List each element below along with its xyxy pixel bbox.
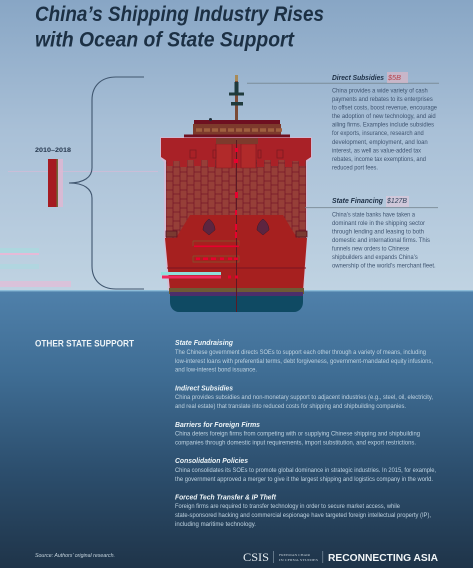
title — [35, 1, 324, 52]
text: direct subsidies body: China provides a wide variety of cash — [332, 88, 428, 94]
text: state financing body: dominant role in the shipping sector — [332, 220, 425, 227]
text: state financing body — [332, 211, 436, 270]
logos: CSIS and Reconnecting Asia: IN CHINA STUDIES — [279, 558, 319, 562]
panel: consolidation policies: China consolidates its SOEs to promote global dominance in strategic industries. In 2015, for example, — [175, 467, 436, 474]
text: direct subsidies body: development, employment, and loan — [332, 139, 428, 146]
ship red dashes — [161, 148, 239, 278]
heading: state financing — [332, 196, 409, 207]
ship bridge — [184, 118, 290, 138]
text: direct subsidies body — [332, 88, 438, 171]
text: state financing body: China’s state banks have taken a — [332, 211, 416, 218]
panel: consolidation policies — [175, 456, 436, 483]
heading: other state support: OTHER STATE SUPPORT — [35, 338, 134, 348]
ship container stacks — [166, 160, 306, 240]
panel: indirect subsidies: China provides subsidies and non-monetary support to adjacent industries (e.g., steel, oil, electricity, — [175, 394, 433, 401]
text: direct subsidies body: the adoption of new technology, and aid — [332, 113, 436, 120]
panel: indirect subsidies: and real estate) that translate into reduced costs for shipping and shipbuilding companies. — [175, 403, 406, 410]
logos: CSIS and Reconnecting Asia: FREEMAN CHAIR — [279, 553, 310, 557]
ship stripes and waterline — [166, 138, 307, 312]
panel: direct subsidies — [247, 72, 439, 171]
text: direct subsidies body: for exports, insurance, research and — [332, 130, 424, 137]
panel: forced tech transfer and IP theft: Forced Tech Transfer & IP Theft — [175, 492, 276, 502]
panel: state fundraising: and low-interest bond issuance. — [175, 367, 257, 374]
text: state financing body: through lending and leasing to both — [332, 228, 425, 236]
panel: state fundraising: low-interest loans with preferential terms, debt forgiveness, government-mandated equity infusions, — [175, 358, 433, 365]
logos: CSIS and Reconnecting Asia: CSIS — [243, 552, 269, 564]
panel: state fundraising: State Fundraising — [175, 338, 233, 347]
title: with Ocean of State Support — [35, 26, 295, 52]
panel: consolidation policies: the government approved a merger to give it the largest shipping and logistics company in the world. — [175, 476, 433, 483]
panel: barriers for foreign firms — [175, 420, 421, 446]
heading: state financing: $127B — [386, 196, 407, 205]
panel: state fundraising: The Chinese government directs SOEs to support each other through a variety of means, including — [175, 349, 427, 356]
logos: CSIS and Reconnecting Asia — [243, 551, 438, 564]
panel: barriers for foreign firms: Barriers for Foreign Firms — [175, 420, 260, 429]
panel: forced tech transfer and IP theft: Foreign firms are required to transfer technology in order to secure market access, while — [175, 503, 401, 510]
heading: direct subsidies: $5B — [387, 73, 401, 82]
text: state financing body: ownership of the world’s merchant fleet. — [332, 262, 436, 270]
text: state financing body: shipbuilders and expands China’s — [332, 254, 418, 261]
text: state financing body: funnels new orders to Chinese — [332, 246, 410, 252]
title: China’s Shipping Industry Rises — [35, 1, 324, 26]
panel: barriers for foreign firms: China deters foreign firms from competing with or supplying Chinese shipping and shipbuilding — [175, 430, 421, 438]
ship deck — [161, 138, 311, 168]
heading: state financing: State Financing — [332, 196, 383, 205]
heading: direct subsidies — [332, 72, 408, 83]
ship mast — [229, 75, 244, 122]
panel: consolidation policies: Consolidation Policies — [175, 456, 248, 465]
brace — [69, 77, 144, 289]
ship lower hull — [165, 215, 307, 291]
panel: barriers for foreign firms: companies through domestic input requirements, import substitution, and export restrictions. — [175, 440, 416, 446]
ship anchors — [203, 219, 269, 235]
ship hull outline halo — [160, 137, 312, 291]
text: direct subsidies body: ailing firms. Examples include subsidies — [332, 122, 434, 129]
timeframe bar: 2010–2018 — [35, 147, 71, 207]
sky background — [0, 0, 473, 291]
text: direct subsidies body: payments and rebates to its enterprises — [332, 96, 433, 103]
text: direct subsidies body: interest, as well as value-added tax — [332, 147, 422, 154]
icon: container ship — [160, 75, 312, 312]
text: direct subsidies body: rebates, income tax exemptions, and — [332, 156, 427, 163]
text: direct subsidies body: to offset costs, boost revenue, encourage — [332, 105, 438, 112]
panel: indirect subsidies — [175, 384, 433, 410]
panel: state financing — [305, 196, 438, 270]
timeframe bar: 2010–2018: 2010–2018 — [35, 147, 71, 154]
text: direct subsidies body: reduced port fees. — [332, 164, 378, 171]
panel: indirect subsidies: Indirect Subsidies — [175, 384, 233, 392]
panel: state fundraising — [175, 338, 433, 374]
source note: Source: Authors’ original research. — [35, 553, 115, 559]
ocean background — [0, 291, 473, 568]
heading: direct subsidies: Direct Subsidies — [332, 73, 384, 82]
logos: CSIS and Reconnecting Asia: RECONNECTING ASIA — [328, 553, 438, 564]
panel: forced tech transfer and IP theft — [175, 492, 431, 528]
panel: forced tech transfer and IP theft: state-sponsored hacking and commercial espionage have targeted foreign intellectual property (IP), — [175, 512, 431, 519]
panel: forced tech transfer and IP theft: including maritime technology. — [175, 521, 256, 528]
text: state financing body: domestic and international firms. This — [332, 237, 430, 244]
